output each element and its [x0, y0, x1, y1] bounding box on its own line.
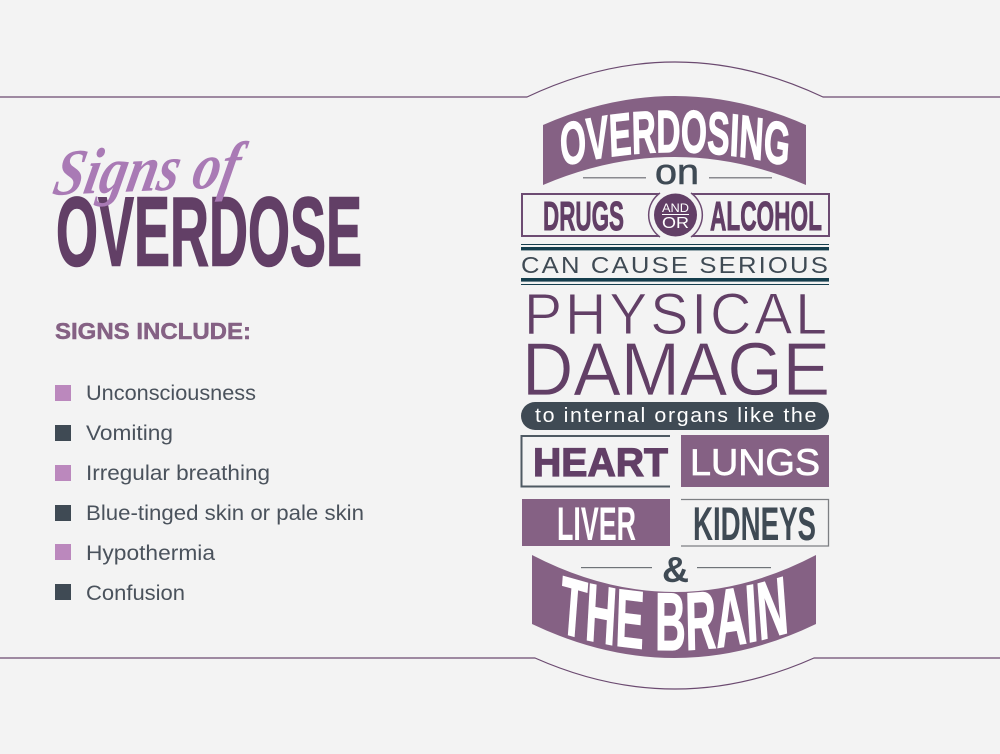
box: drugs and/or alcohol: DRUGS	[543, 193, 624, 239]
item: Unconsciousness: Unconsciousness	[86, 382, 256, 405]
typographic badge	[520, 96, 830, 658]
subheading: signs include: SIGNS INCLUDE:	[55, 318, 251, 344]
item: Confusion: Confusion	[86, 582, 185, 605]
box: liver	[522, 497, 670, 550]
box: lungs: LUNGS	[690, 442, 820, 483]
item: Vomiting	[55, 422, 173, 445]
title: Signs of Overdose	[48, 129, 362, 286]
band: can cause serious: CAN CAUSE SERIOUS	[521, 252, 830, 278]
box: drugs and/or alcohol: OR	[662, 215, 689, 232]
banner: the brain: THE BRAIN	[562, 576, 788, 651]
band: can cause serious	[521, 244, 830, 285]
box: drugs and/or alcohol	[522, 193, 829, 239]
box: drugs and/or alcohol: AND	[662, 201, 689, 215]
bottom frame line with arc	[0, 658, 1000, 689]
item: Vomiting: Vomiting	[86, 422, 173, 445]
box: liver: LIVER	[557, 497, 636, 550]
box: kidneys	[681, 497, 828, 550]
list of signs	[55, 382, 364, 605]
word: damage: DAMAGE	[522, 327, 830, 411]
title word: OVERDOSE: OVERDOSE	[56, 176, 362, 286]
title script: Signs of: Signs of	[48, 129, 253, 210]
box: lungs	[681, 435, 829, 487]
pill: to internal organs like the	[521, 402, 829, 430]
word: physical: PHYSICAL	[524, 282, 830, 347]
box: drugs and/or alcohol: ALCOHOL	[710, 193, 822, 239]
item: Irregular breathing: Irregular breathing	[86, 462, 270, 485]
word: on: on	[655, 151, 699, 192]
item: Blue-tinged skin: Blue-tinged skin or pale skin	[86, 502, 364, 525]
ampersand with rules: &	[662, 549, 689, 590]
pill: to internal organs like the: to internal organs like the	[535, 405, 818, 427]
banner: Overdosing: OVERDOSING	[560, 110, 789, 165]
box: kidneys: KIDNEYS	[693, 497, 816, 550]
top frame line with arc	[0, 62, 1000, 97]
item: Hypothermia: Hypothermia	[86, 542, 215, 565]
box: heart: HEART	[533, 441, 668, 485]
